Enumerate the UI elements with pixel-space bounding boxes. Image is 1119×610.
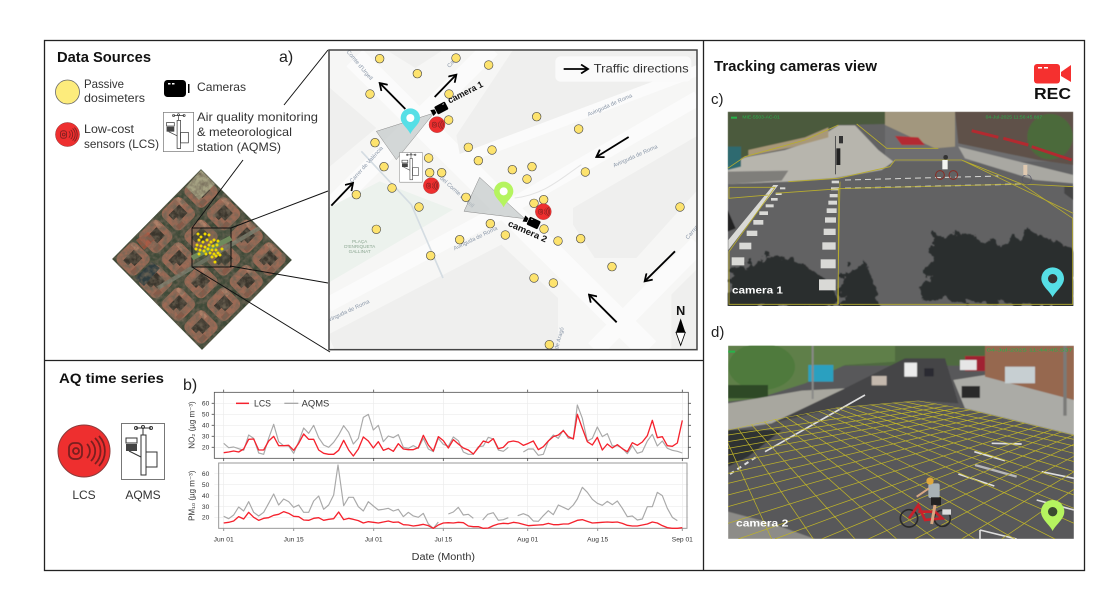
low-cost sensor 3	[535, 204, 551, 220]
park name: D'ENRIQUETA	[344, 244, 376, 249]
park name: GALLINAT	[349, 249, 371, 254]
passive dosimeters	[352, 54, 684, 349]
pin: camera 1	[401, 108, 420, 134]
legend text: passive dosimeters	[84, 77, 145, 105]
vertical panel divider	[702, 40, 704, 570]
cyclists	[835, 136, 1031, 184]
REC icon	[1034, 64, 1071, 103]
PM10 LCS series	[224, 512, 682, 528]
panel: data sources	[55, 49, 330, 352]
label c): c)	[711, 91, 724, 108]
road names: Avinguda de Roma	[453, 225, 499, 252]
tracking grid	[728, 400, 1074, 539]
study area box with dosimeters	[192, 228, 231, 267]
camera 1 field of view	[376, 113, 434, 160]
legend text: AQMS: Air quality monitoring	[197, 110, 318, 124]
x tick labels: Jul 01	[365, 537, 383, 544]
y tick labels: 60	[202, 401, 210, 408]
x axis title: Date (Month)	[412, 552, 475, 563]
traffic directions legend: Traffic directions	[594, 62, 689, 75]
road names: Carrer de València	[349, 145, 385, 184]
road names: Avinguda de Roma	[325, 299, 371, 325]
panel: street map	[325, 48, 700, 350]
park name: PLAÇA	[352, 239, 368, 244]
horizontal panel divider	[45, 360, 703, 362]
large LCS icon	[58, 425, 110, 477]
chart legend	[236, 398, 329, 408]
legend icon: camera	[164, 80, 190, 97]
camera 1 view	[725, 112, 1078, 309]
large AQMS icon	[122, 424, 164, 480]
panel: AQ time series	[58, 370, 693, 563]
camera 1 caption: camera 1	[732, 286, 784, 297]
camera 2 caption: camera 2	[736, 518, 788, 529]
y tick labels: 30	[202, 434, 210, 441]
panel: tracking cameras view	[712, 60, 1074, 539]
heading: data sources: Data Sources	[57, 49, 151, 66]
satellite map of the district	[112, 169, 292, 350]
y tick labels: 20	[202, 515, 210, 522]
crosswalk stripes	[728, 176, 1022, 290]
y tick labels: 40	[202, 493, 210, 500]
NO2 AQMS series	[224, 405, 682, 455]
camera 2 pin	[1041, 500, 1064, 531]
traffic directions legend	[555, 56, 691, 82]
traffic arrows	[331, 75, 675, 322]
legend text: low-cost sensors: sensors (LCS)	[84, 137, 159, 151]
road names	[325, 49, 700, 350]
y tick labels	[202, 401, 210, 522]
AQMS caption: AQMS	[125, 488, 161, 502]
time series chart	[187, 390, 693, 563]
road names: de Aragó	[554, 327, 566, 350]
camera 1 pin	[1041, 267, 1064, 297]
legend text: cameras: Cameras	[197, 80, 246, 94]
legend icon: AQMS	[163, 112, 194, 152]
label d): d)	[711, 324, 724, 341]
legend text: passive dosimeters: Passive	[84, 77, 124, 91]
heading: tracking cameras view: Tracking cameras view	[714, 58, 877, 75]
camera 2 field of view	[464, 177, 525, 219]
y tick labels: 50	[202, 412, 210, 419]
low-cost sensor 1	[429, 117, 445, 133]
legend text: AQMS	[197, 110, 318, 154]
y tick labels: 20	[202, 445, 210, 452]
camera 2 view	[728, 346, 1074, 539]
tree shadows	[725, 230, 1078, 309]
heading: AQ time series: AQ time series	[59, 370, 164, 386]
overlay timestamp: 04-Jul-2025 11:56:45.887	[986, 114, 1042, 120]
NO2 plot frame	[212, 390, 691, 461]
camera 1 icon	[430, 101, 449, 117]
PM10 plot frame	[219, 463, 687, 531]
legend text: passive dosimeters: dosimeters	[84, 91, 145, 105]
x tick labels: Jun 15	[284, 537, 304, 544]
storefront signs	[972, 131, 1072, 160]
y tick labels: 60	[202, 471, 210, 478]
chart legend: AQMS	[302, 398, 329, 408]
tracking zones	[728, 124, 1073, 304]
zoom connector lines	[192, 50, 330, 352]
map border	[329, 50, 697, 350]
pin: camera 2	[494, 182, 513, 207]
roads, city blocks and park	[330, 151, 582, 282]
x tick labels: Jul 15	[434, 537, 453, 544]
camera 2 icon	[522, 215, 541, 229]
low-cost sensor 2	[423, 178, 439, 194]
overlay timestamp: 04-Jul-2025 11:44:45.537	[987, 348, 1073, 354]
y tick labels: 50	[202, 482, 210, 489]
north arrow	[676, 304, 685, 345]
REC icon: REC	[1034, 86, 1071, 103]
label a): a)	[279, 49, 293, 66]
x tick labels	[214, 537, 693, 544]
AQMS station on map	[400, 152, 422, 182]
road names: Carrer	[685, 225, 700, 241]
x tick labels: Aug 15	[587, 537, 609, 544]
chart legend: LCS	[254, 398, 271, 408]
y tick labels: 30	[202, 504, 210, 511]
legend icon: low-cost sensor	[55, 122, 80, 147]
overlay timestamp: MIE-5503-AC-01	[742, 114, 780, 120]
x tick labels: Jun 01	[214, 537, 234, 544]
NO2 LCS series	[224, 414, 682, 456]
road names: del Comte Borrell	[438, 176, 475, 209]
y axis title: NO2: NO₂ (µg m⁻³)	[187, 401, 196, 449]
LCS caption: LCS	[72, 488, 96, 502]
cyclist	[900, 477, 951, 527]
label b): b)	[183, 377, 197, 394]
lane markings	[730, 395, 1074, 539]
x tick labels: Sep 01	[672, 537, 693, 544]
x tick labels: Aug 01	[517, 537, 539, 544]
camera 2 label: camera 2	[507, 218, 549, 244]
legend icon: passive dosimeter	[56, 80, 80, 104]
road names: Avinguda de Roma	[587, 93, 634, 118]
y tick labels: 40	[202, 423, 210, 430]
legend text: AQMS: station (AQMS)	[197, 140, 281, 154]
legend text: low-cost sensors	[84, 122, 159, 151]
legend text: AQMS: & meteorological	[197, 125, 292, 139]
y axis title: PM10: PM₁₀ (µg m⁻³)	[187, 470, 196, 521]
road names: Comte d'Urgell	[345, 49, 373, 82]
road names: Carrer	[447, 53, 462, 69]
camera 1 label: camera 1	[446, 79, 485, 105]
road names: Avinguda de Roma	[612, 144, 659, 169]
PM10 AQMS series	[224, 465, 677, 528]
north arrow: N	[676, 304, 685, 318]
legend text: low-cost sensors: Low-cost	[84, 122, 135, 136]
overlay timestamp	[731, 115, 1042, 119]
